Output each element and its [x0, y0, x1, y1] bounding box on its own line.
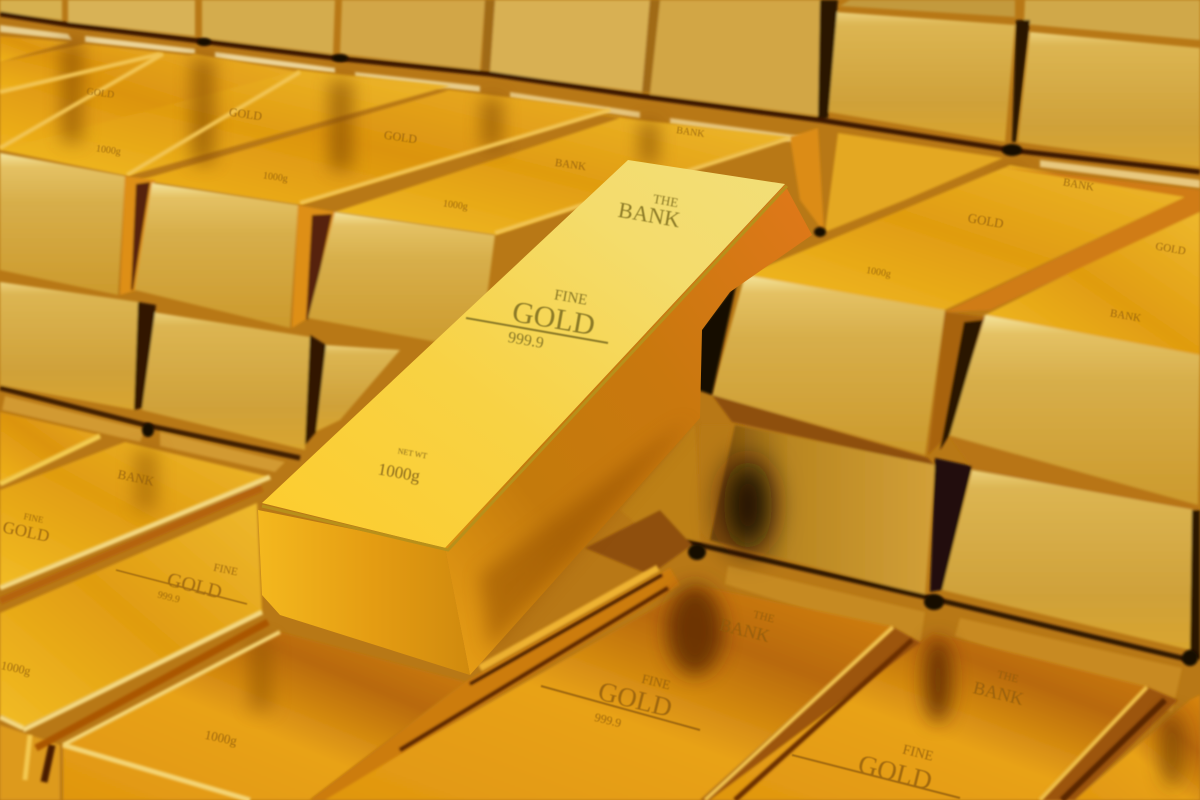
back row of gold bars: [0, 0, 1200, 172]
shadow reflections on upper tops: [62, 42, 1023, 240]
engravings on surrounding bars: FINE: [901, 743, 935, 765]
engravings on surrounding bars: 999.9: [156, 590, 181, 606]
engravings on surrounding bars: 1000g: [262, 170, 288, 185]
engravings on surrounding bars: GOLD: [86, 86, 115, 101]
edge highlights on upper tops: [0, 54, 790, 233]
left lower gold bars: [0, 412, 465, 800]
left front faces of gold bars: [0, 153, 495, 472]
engravings on surrounding bars: FINE: [212, 562, 239, 579]
engraving: 1000g: NET WT: [397, 447, 428, 461]
bottom-row edges and gaps: [400, 568, 1165, 800]
engravings on surrounding bars: 1000g: [865, 265, 892, 280]
top face of central bar: [262, 160, 785, 548]
engraving: fine gold 999.9: [466, 287, 608, 352]
engravings on surrounding bars: GOLD: [1, 517, 51, 546]
shadow reflections on bottom row: [667, 585, 1184, 788]
engravings on surrounding bars: GOLD: [595, 676, 675, 723]
shadow band on end and side faces: [480, 420, 690, 650]
dark shadow in right lower face: [724, 459, 772, 551]
engraving: fine gold 999.9: FINE: [553, 287, 589, 309]
engravings on surrounding bars: GOLD: [228, 105, 263, 123]
engravings on surrounding bars: 1000g: [0, 658, 32, 678]
central tilted gold bar: [258, 160, 812, 675]
engravings on surrounding bars: FINE: [23, 511, 45, 525]
engravings on surrounding bars: FINE: [640, 671, 672, 692]
engraving: fine gold 999.9: 999.9: [507, 329, 545, 352]
engravings on surrounding bars: GOLD: [967, 210, 1005, 231]
bright bevel on central bar edge: [262, 186, 787, 550]
engravings on surrounding bars: BANK: [1062, 176, 1095, 194]
engravings on surrounding bars: THE: [752, 609, 776, 626]
engravings on surrounding bars: GOLD: [165, 569, 224, 604]
engravings on surrounding bars: BANK: [116, 466, 156, 489]
engravings on surrounding bars: BANK: [676, 125, 706, 140]
engravings on surrounding bars: BANK: [717, 614, 772, 646]
side face of central bar: [445, 185, 812, 675]
engravings on surrounding bars: 999.9: [593, 710, 623, 730]
engraving: the bank: THE: [652, 191, 680, 210]
engravings on surrounding bars: BANK: [554, 157, 587, 173]
engravings on surrounding bars: GOLD: [383, 128, 418, 146]
engraving: the bank: BANK: [616, 197, 682, 232]
engravings on surrounding bars: 1000g: [203, 727, 239, 748]
engravings on surrounding bars: GOLD: [1154, 240, 1187, 258]
engravings on surrounding bars: BANK: [971, 677, 1026, 709]
shadow reflections on lower-left tops: [135, 450, 272, 710]
end face of central bar: [258, 510, 470, 675]
cream ledges under back row: [0, 25, 1200, 188]
edge highlights and gaps on lower-left bars: [0, 436, 280, 800]
engravings on surrounding bars: BANK: [1109, 307, 1142, 325]
engravings on surrounding bars: GOLD: [855, 749, 935, 796]
left upper stack of gold bars: [0, 36, 824, 235]
engraving: 1000g: [376, 447, 428, 486]
engravings on surrounding bars: 1000g: [95, 143, 121, 158]
engraving: 1000g: 1000g: [376, 460, 422, 486]
engravings on surrounding bars: 1000g: [442, 198, 468, 213]
bottom row of gold bars: [310, 568, 1200, 800]
engraving: fine gold 999.9: GOLD: [510, 295, 598, 342]
engravings on surrounding bars: THE: [996, 669, 1020, 686]
dark junctions between stacks: [142, 38, 1198, 666]
right stack of gold bars: [585, 133, 1200, 712]
